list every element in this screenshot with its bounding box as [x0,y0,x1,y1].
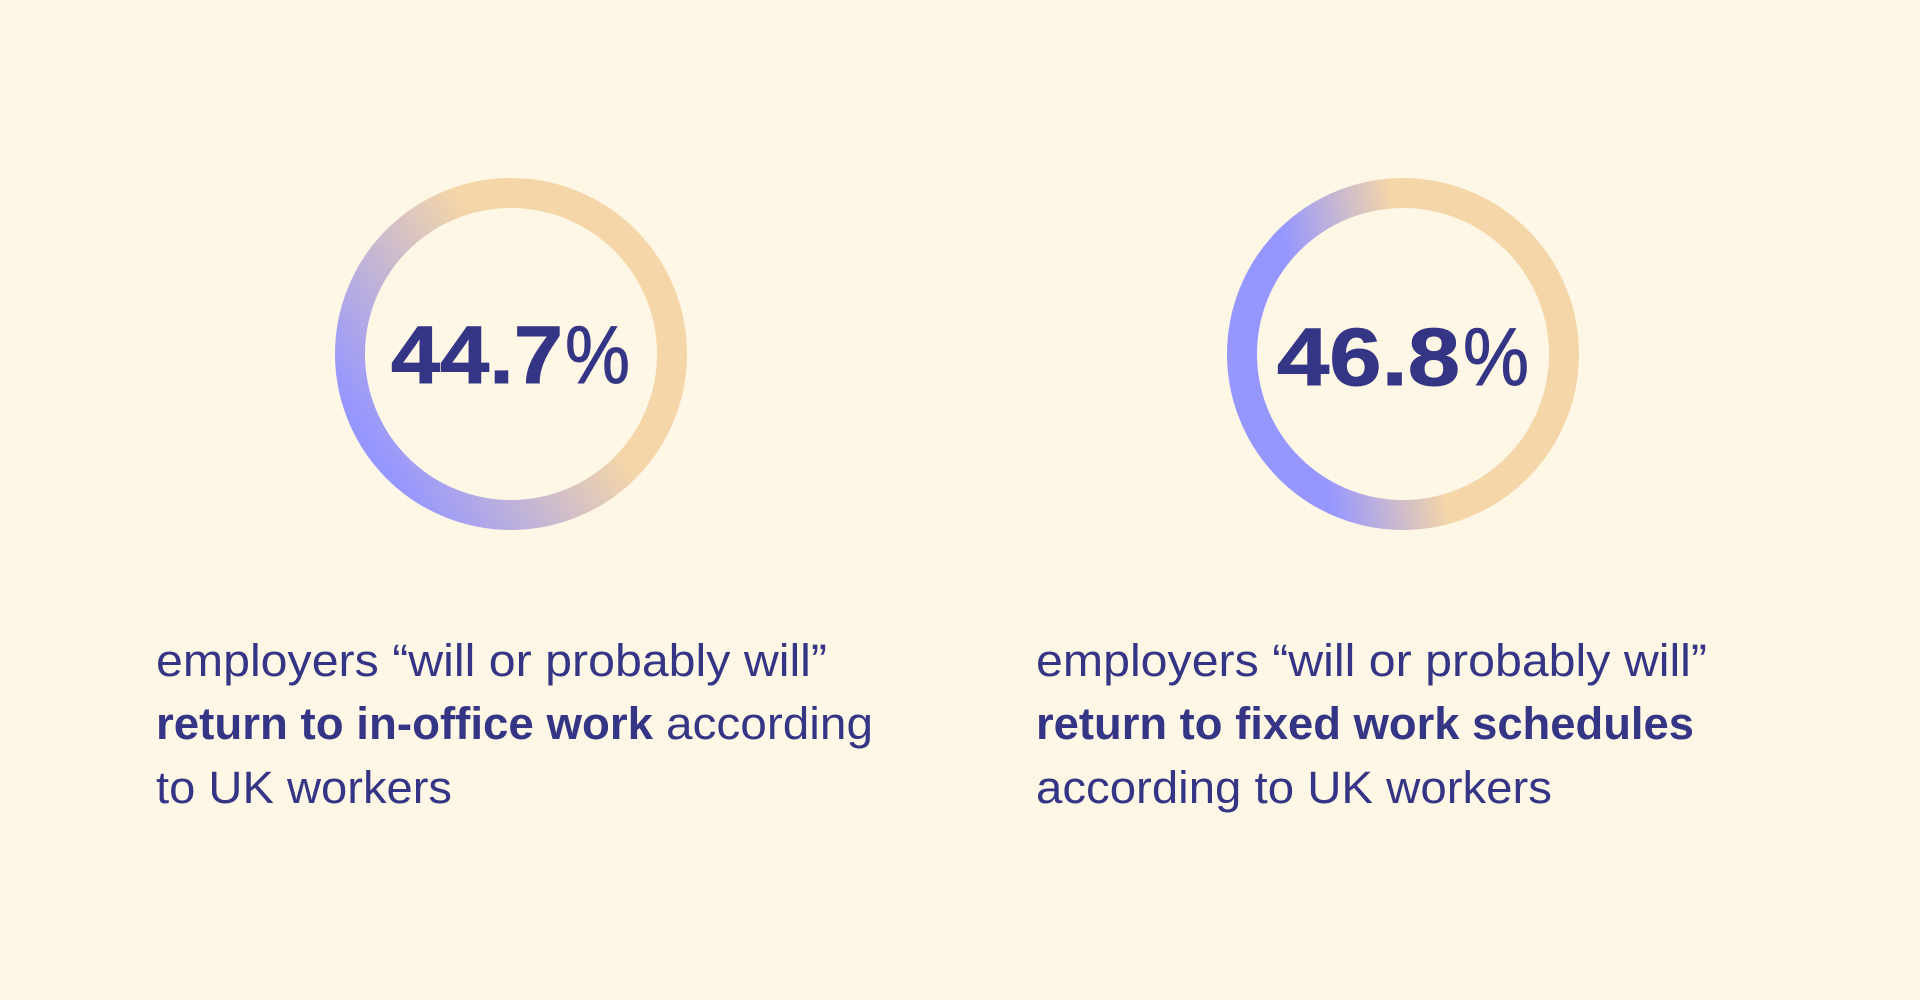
stat: 46.8%: % [1463,312,1529,403]
stat: 44.7% [391,310,630,401]
description: in-office work: return to in-office work [156,698,654,749]
donut ring: 46.8% [1242,193,1564,515]
donut ring: 44.7% [350,193,672,515]
description: fixed work schedules: return to fixed work schedules [1036,698,1694,749]
stat: 46.8%: 46.8 [1277,312,1460,403]
description: in-office work: according [666,698,873,749]
description: in-office work: employers “will or probably will” [156,635,827,686]
panel: fixed work schedules [1036,193,1707,813]
description: fixed work schedules: employers “will or probably will” [1036,635,1707,686]
panel: in-office work [156,193,873,813]
stat: 44.7%: % [565,310,630,401]
description: in-office work [156,635,873,813]
description: in-office work: to UK workers [156,762,452,813]
description: fixed work schedules: according to UK workers [1036,762,1552,813]
stat: 44.7%: 44.7 [391,310,563,401]
description: fixed work schedules [1036,635,1707,813]
stat: 46.8% [1277,312,1529,403]
